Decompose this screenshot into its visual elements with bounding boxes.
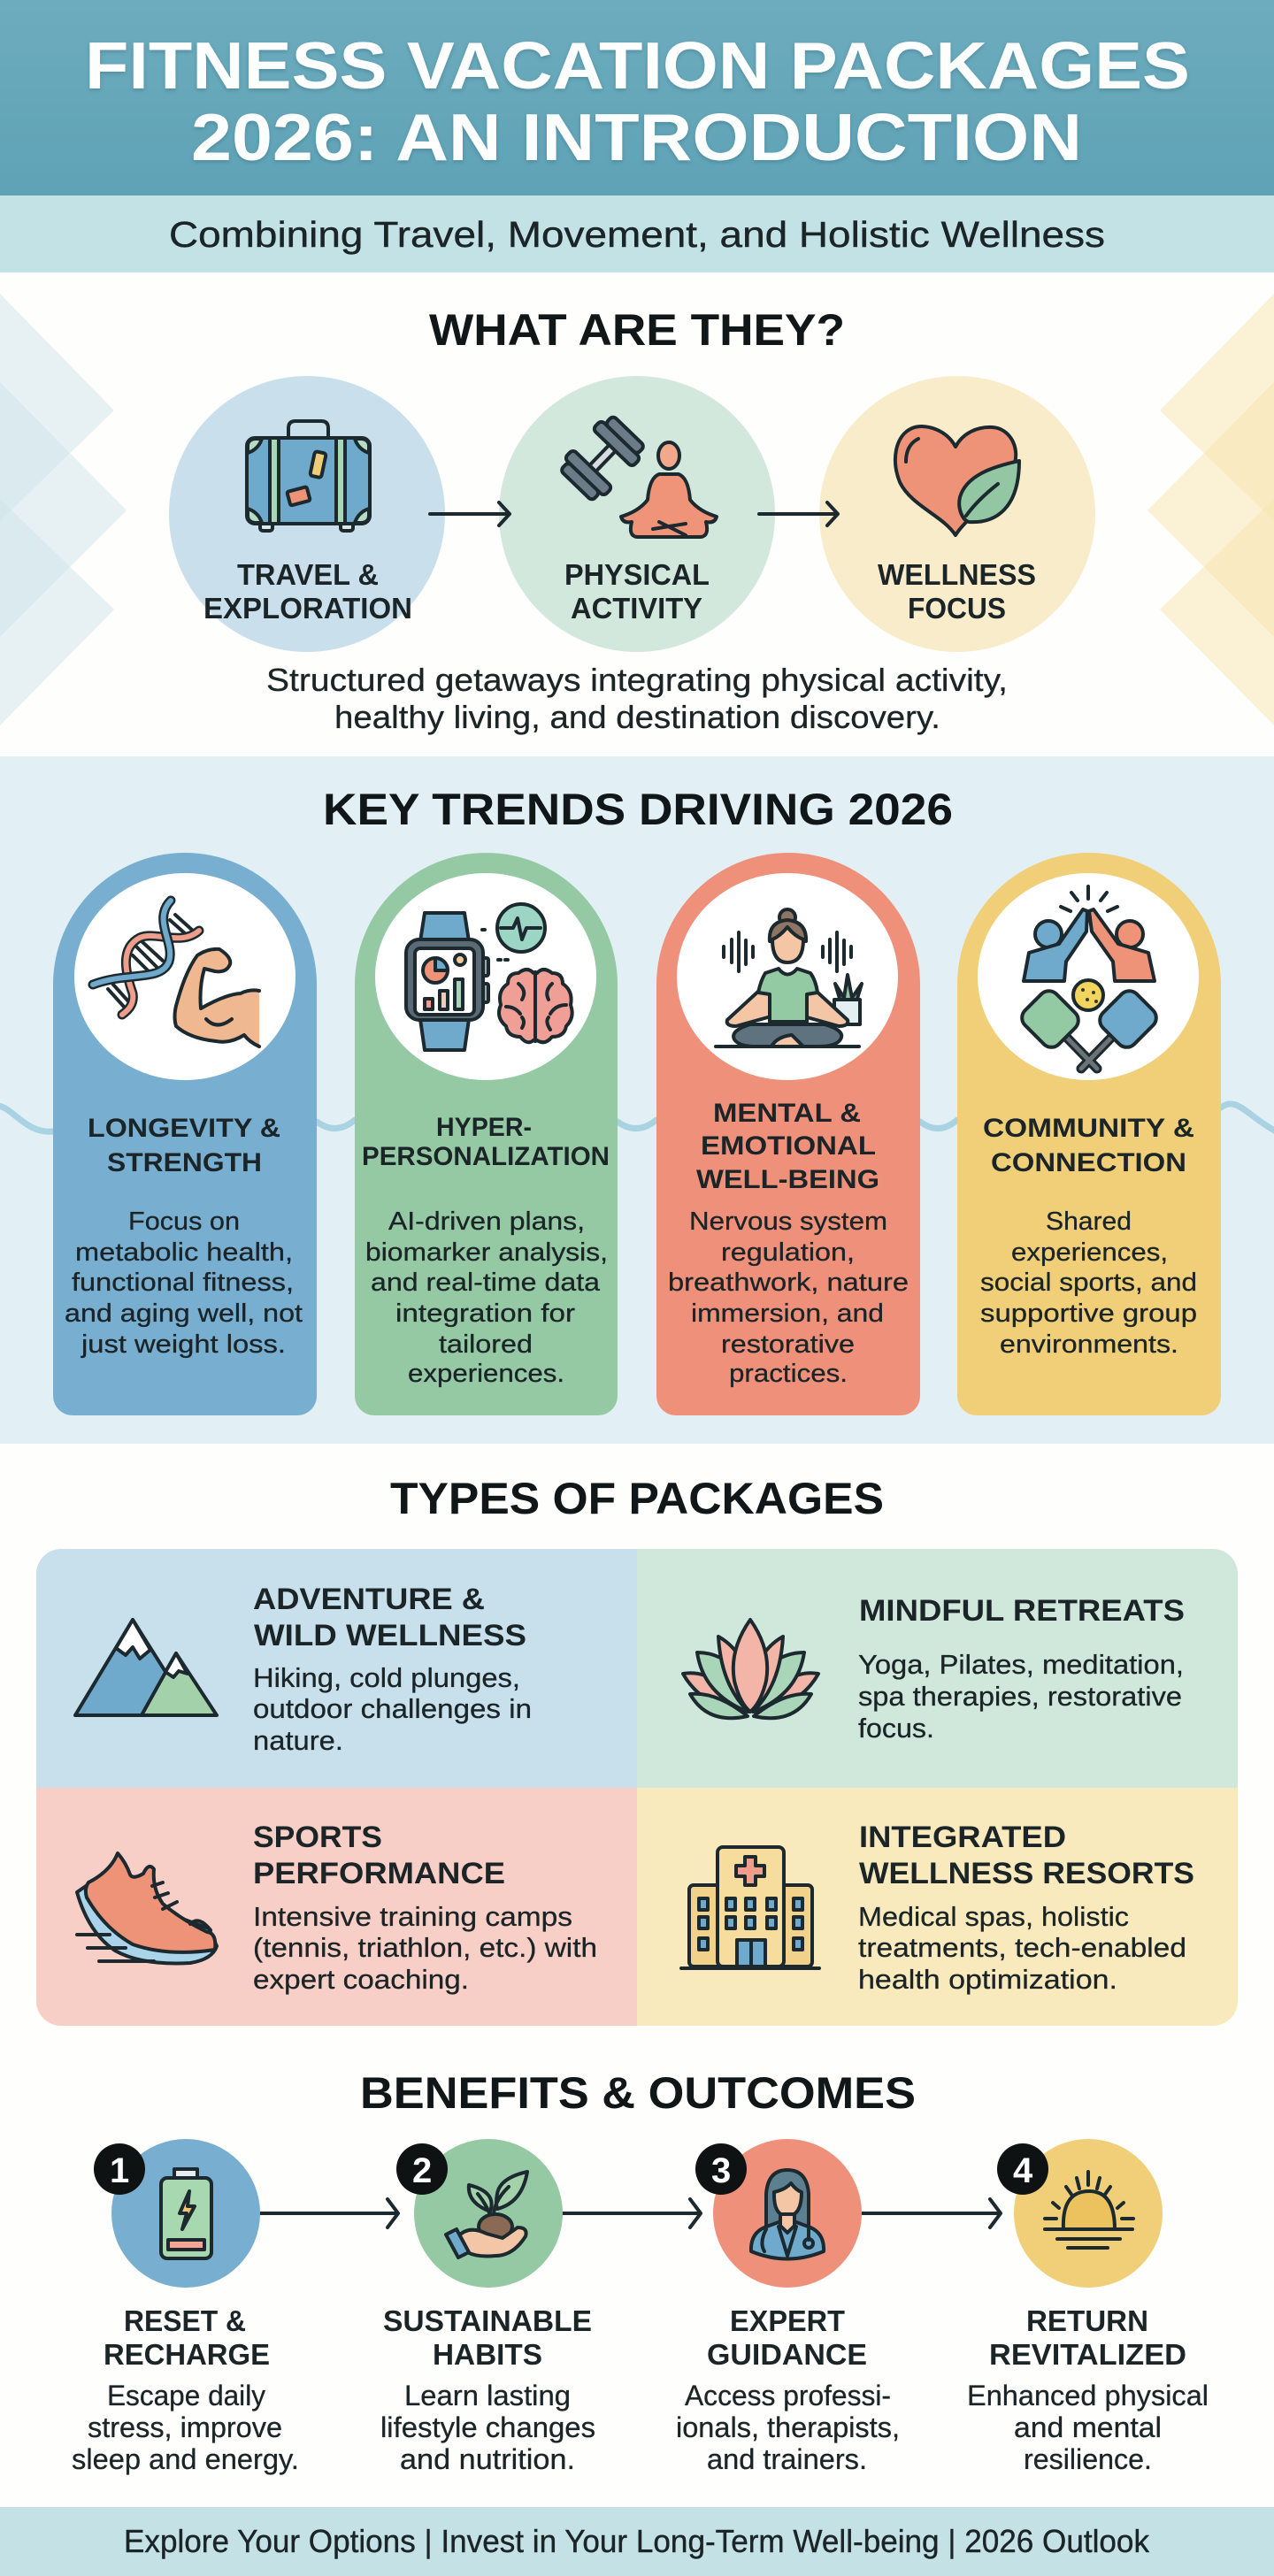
header banner (0, 0, 1274, 196)
tile: sports performance (36, 1788, 637, 2026)
card title (983, 1114, 1194, 1177)
card text: just weight loss. (81, 1330, 286, 1359)
icon: seedling in hand (446, 2172, 527, 2258)
step title: GUIDANCE (707, 2338, 867, 2371)
tile title: PERFORMANCE (253, 1857, 505, 1890)
heading: benefits and outcomes: BENEFITS & OUTCOMES (360, 2068, 916, 2118)
step text: sleep and energy. (72, 2443, 299, 2475)
label: wellness focus (878, 558, 1036, 625)
label: travel and exploration (203, 558, 412, 625)
step text (967, 2380, 1209, 2475)
card: hyper-personalization (355, 853, 618, 1415)
card text: practices. (729, 1360, 848, 1388)
card: community and connection (957, 853, 1221, 1415)
tile text: Intensive training camps (253, 1901, 572, 1932)
card text: regulation, (721, 1238, 855, 1267)
icon: smartwatch (406, 913, 488, 1050)
card text: integration for (395, 1300, 575, 1328)
step 2: sustainable habits (380, 2139, 595, 2475)
card title: COMMUNITY & (983, 1114, 1194, 1143)
card text: functional fitness, (72, 1269, 294, 1297)
icon: lotus (683, 1620, 818, 1718)
heading: types of packages: TYPES OF PACKAGES (390, 1474, 884, 1523)
number badge 2: 2 (412, 2151, 432, 2190)
footer band (0, 2507, 1274, 2576)
icon: potted plant (834, 975, 862, 1024)
card text: breathwork, nature (668, 1269, 909, 1297)
card title (696, 1099, 879, 1194)
icon: paddles (1017, 986, 1161, 1069)
card text: biomarker analysis, (365, 1238, 608, 1267)
card title: CONNECTION (991, 1148, 1186, 1177)
card text: tailored (439, 1330, 533, 1359)
step title (989, 2304, 1186, 2371)
step text: ionals, therapists, (676, 2411, 900, 2443)
icon: flexed arm (175, 949, 259, 1046)
card title (88, 1114, 280, 1177)
footer band: Explore Your Options | Invest in Your Long-Term Well-being | 2026 Outlook (124, 2523, 1150, 2559)
step text: and mental (1014, 2411, 1162, 2443)
card title: STRENGTH (107, 1148, 262, 1177)
card text: and aging well, not (65, 1300, 303, 1328)
card: mental and emotional well-being (656, 853, 920, 1415)
tile title: SPORTS (253, 1821, 382, 1854)
icon: battery (161, 2169, 211, 2258)
step 4: return revitalized (967, 2139, 1209, 2475)
label: physical activity (564, 558, 710, 625)
tile text: Medical spas, holistic (858, 1901, 1129, 1932)
step title: REVITALIZED (989, 2338, 1186, 2371)
card text: experiences, (1011, 1238, 1168, 1267)
tile text: Hiking, cold plunges, (253, 1662, 520, 1693)
tile text (253, 1901, 597, 1995)
circle: wellness focus (819, 376, 1095, 652)
step text: Access professi- (685, 2380, 891, 2411)
card text (980, 1208, 1197, 1359)
tile title (253, 1583, 526, 1652)
step text: and nutrition. (400, 2443, 575, 2475)
tile text (858, 1901, 1186, 1995)
number badge 1 (94, 2143, 145, 2195)
heading: what are they: WHAT ARE THEY? (429, 305, 845, 355)
card title (362, 1113, 610, 1171)
icon: dumbbell (556, 412, 649, 504)
step title (707, 2304, 867, 2371)
tile text: spa therapies, restorative (858, 1681, 1182, 1712)
description text (266, 662, 1008, 735)
step text (72, 2380, 299, 2475)
tile: adventure and wild wellness (36, 1549, 637, 1788)
tile text: health optimization. (858, 1964, 1117, 1995)
tile text: focus. (858, 1713, 934, 1744)
step text: stress, improve (88, 2411, 282, 2443)
number badge 3 (695, 2143, 747, 2195)
step text: and trainers. (707, 2443, 867, 2475)
icon: sound waves (724, 932, 851, 971)
tile text: Yoga, Pilates, meditation, (858, 1649, 1184, 1680)
step title: RECHARGE (104, 2338, 270, 2371)
step title: HABITS (433, 2338, 542, 2371)
card text (65, 1208, 303, 1359)
card: longevity and strength (53, 853, 317, 1415)
tile: integrated wellness resorts (637, 1788, 1238, 2026)
tile title: WILD WELLNESS (254, 1619, 526, 1652)
icon: running shoe (77, 1853, 217, 1963)
icon: dna (93, 901, 199, 1015)
icon: meditating woman (716, 909, 859, 1046)
card text: restorative (721, 1330, 855, 1359)
tile text: treatments, tech-enabled (858, 1932, 1186, 1963)
icon: brain (499, 970, 572, 1042)
right yellow diamond pattern (1147, 294, 1274, 725)
card title: PERSONALIZATION (362, 1142, 610, 1171)
icon: high five (1024, 886, 1155, 981)
arrows between steps (260, 2199, 1001, 2227)
card title: EMOTIONAL (701, 1131, 876, 1161)
card text: supportive group (980, 1300, 1197, 1328)
number badge 4: 4 (1013, 2151, 1033, 2190)
label: wellness focus: FOCUS (908, 592, 1006, 625)
step text: Escape daily (107, 2380, 265, 2411)
step text (380, 2380, 595, 2475)
step title: RETURN (1026, 2304, 1148, 2337)
step title: RESET & (124, 2304, 246, 2337)
card text (668, 1208, 909, 1388)
tile title (859, 1821, 1194, 1890)
card text: environments. (1000, 1330, 1178, 1359)
label: physical activity: ACTIVITY (571, 592, 702, 625)
title (85, 28, 1190, 174)
icon: meditating figure (621, 442, 717, 537)
tile title: INTEGRATED (859, 1821, 1066, 1854)
tile title: ADVENTURE & (253, 1583, 485, 1616)
connecting wave (0, 1104, 1274, 1132)
step title (383, 2304, 592, 2371)
number badge 2 (396, 2143, 448, 2195)
panel: key trends (0, 756, 1274, 1444)
card text: immersion, and (691, 1300, 884, 1328)
panel: what are they (0, 294, 1274, 735)
tile title (253, 1821, 505, 1890)
description text: healthy living, and destination discovery. (334, 699, 940, 735)
card text: Shared (1046, 1208, 1132, 1236)
tile text: nature. (253, 1725, 343, 1756)
icon: mountains (75, 1620, 217, 1715)
icon: suitcase (247, 421, 370, 531)
label: wellness focus: WELLNESS (878, 558, 1036, 591)
card text: social sports, and (980, 1269, 1197, 1297)
title: 2026: AN INTRODUCTION (191, 100, 1082, 174)
tile text: outdoor challenges in (253, 1693, 532, 1724)
number badge 1: 1 (110, 2151, 129, 2190)
card title: MENTAL & (713, 1099, 861, 1128)
card text: metabolic health, (75, 1238, 293, 1267)
step title (104, 2304, 270, 2371)
step 1: reset and recharge (72, 2139, 299, 2475)
card text: and real-time data (371, 1269, 601, 1297)
card text: Focus on (128, 1208, 240, 1236)
step text: Enhanced physical (967, 2380, 1209, 2411)
label: travel and exploration: TRAVEL & (237, 558, 379, 591)
tile text: expert coaching. (253, 1964, 469, 1995)
heading: key trends: KEY TRENDS DRIVING 2026 (323, 785, 953, 834)
step text: Learn lasting (404, 2380, 571, 2411)
card text (365, 1208, 608, 1388)
step text (676, 2380, 900, 2475)
icon: pulse circle (482, 904, 545, 960)
panel: types of packages (36, 1474, 1238, 2026)
subtitle band (0, 196, 1274, 272)
icon: sunrise (1045, 2172, 1133, 2248)
tile title: MINDFUL RETREATS (859, 1594, 1185, 1628)
step title: EXPERT (730, 2304, 845, 2337)
circle: travel and exploration (169, 376, 445, 652)
icon: pickleball (1073, 980, 1103, 1010)
label: travel and exploration: EXPLORATION (203, 592, 412, 625)
card text: AI-driven plans, (388, 1208, 585, 1236)
tile title: WELLNESS RESORTS (859, 1857, 1194, 1890)
icon: doctor (751, 2170, 824, 2259)
tile text: (tennis, triathlon, etc.) with (253, 1932, 597, 1963)
card title: HYPER- (436, 1113, 532, 1142)
arrow: activity to wellness (759, 502, 838, 525)
number badge 3: 3 (711, 2151, 731, 2190)
tile: mindful retreats (637, 1549, 1238, 1788)
step 3: expert guidance (676, 2139, 900, 2475)
left blue diamond pattern (0, 294, 127, 725)
arrow: travel to activity (430, 502, 510, 525)
icon: heart and leaf (895, 426, 1019, 535)
label: physical activity: PHYSICAL (564, 558, 710, 591)
tile text (858, 1649, 1184, 1744)
circle: physical activity (499, 376, 775, 652)
title: FITNESS VACATION PACKAGES (85, 28, 1190, 103)
subtitle band: Combining Travel, Movement, and Holistic Wellness (169, 214, 1105, 255)
card text: experiences. (408, 1360, 564, 1388)
step text: resilience. (1024, 2443, 1152, 2475)
description text: Structured getaways integrating physical activity, (266, 662, 1008, 698)
panel: benefits and outcomes (72, 2068, 1209, 2475)
step text: lifestyle changes (380, 2411, 595, 2443)
card title: LONGEVITY & (88, 1114, 280, 1143)
card title: WELL-BEING (696, 1165, 879, 1194)
icon: medical resort building (681, 1847, 819, 1968)
number badge 4 (997, 2143, 1048, 2195)
step title: SUSTAINABLE (383, 2304, 592, 2337)
card text: Nervous system (689, 1208, 887, 1236)
tile text (253, 1662, 532, 1756)
